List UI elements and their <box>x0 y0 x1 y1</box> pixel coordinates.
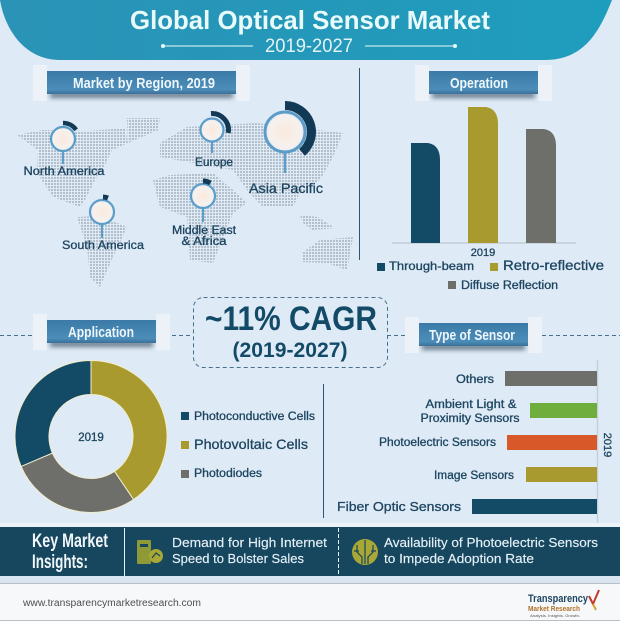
logo: Market Research <box>528 606 580 613</box>
legend: operation: Through-beam <box>389 259 474 273</box>
pin: middle east and africa <box>172 181 237 248</box>
logo: Analysis. Insights. Growth. <box>530 613 580 618</box>
bar chart: type of sensor: Proximity Sensors <box>420 413 520 425</box>
text: insight one: Demand for High Internet <box>172 535 327 550</box>
legend: application: Photovoltaic Cells <box>194 436 308 452</box>
logo <box>528 590 599 618</box>
icon: internet speed <box>137 540 163 564</box>
bar chart: type of sensor: Photoelectric Sensors <box>379 437 496 449</box>
heading: application <box>33 314 170 350</box>
panel: operation <box>377 65 604 292</box>
legend: application: Photodiodes <box>194 468 262 480</box>
footer <box>0 584 620 621</box>
heading: market by region <box>33 65 250 101</box>
pin: south america <box>62 197 144 252</box>
pin: middle east and africa: & Africa <box>182 236 227 248</box>
icon: circuit <box>352 539 378 565</box>
pin: europe: Europe <box>195 157 233 169</box>
pin: middle east and africa: Middle East <box>172 225 237 237</box>
heading: type of sensor: Type of Sensor <box>429 327 515 344</box>
text: insight two <box>384 535 599 566</box>
heading: market by region: Market by Region, 2019 <box>73 75 215 92</box>
pin: north america <box>24 123 105 178</box>
legend: operation <box>377 258 604 292</box>
bar chart: type of sensor: Image Sensors <box>434 470 514 482</box>
callout: CAGR: (2019-2027) <box>232 339 348 362</box>
legend: application: Photoconductive Cells <box>194 411 315 423</box>
panel: application <box>15 314 315 513</box>
pin: europe <box>195 113 233 169</box>
heading: type of sensor <box>405 317 542 353</box>
bar chart: operation: 2019 <box>471 247 495 259</box>
band: key market insights <box>0 523 620 583</box>
heading: key market insights: Insights: <box>32 552 88 573</box>
bar chart: type of sensor: 2019 <box>601 433 613 457</box>
legend: operation: Retro-reflective <box>503 258 604 273</box>
legend: application <box>181 411 315 480</box>
donut chart: 2019 <box>78 432 104 444</box>
logo: Transparency <box>528 593 589 605</box>
world dot map <box>17 118 353 287</box>
pin: asia pacific: Asia Pacific <box>249 181 323 196</box>
callout: CAGR <box>194 298 388 368</box>
text: insight one <box>172 535 327 566</box>
heading: operation <box>415 65 552 101</box>
header banner <box>0 0 612 60</box>
donut chart <box>15 360 167 513</box>
heading: application: Application <box>68 324 134 341</box>
text: insight two: to Impede Adoption Rate <box>384 551 534 566</box>
subtitle years: 2019-2027 <box>265 36 353 57</box>
text: insight two: Availability of Photoelectric Sensors <box>384 535 599 550</box>
heading: operation: Operation <box>450 75 508 92</box>
text: insight one: Speed to Bolster Sales <box>172 551 304 566</box>
bar chart: operation <box>392 107 576 259</box>
title: Global Optical Sensor Market <box>130 5 490 35</box>
legend: operation: Diffuse Reflection <box>461 280 558 292</box>
pin: south america: South America <box>62 238 144 252</box>
panel: type of sensor <box>337 317 613 523</box>
heading: key market insights: Key Market <box>32 531 108 552</box>
pin: asia pacific <box>249 106 323 196</box>
bar chart: type of sensor <box>337 360 613 523</box>
bar chart: type of sensor: Ambient Light & <box>426 399 517 411</box>
panel: market by region <box>17 65 353 287</box>
website url: www.transparencymarketresearch.com <box>22 598 201 609</box>
heading: key market insights <box>32 531 108 573</box>
pin: north america: North America <box>24 164 105 178</box>
bar chart: type of sensor: Others <box>456 374 494 386</box>
bar chart: type of sensor: Fiber Optic Sensors <box>337 499 462 514</box>
callout: CAGR: ~11% CAGR <box>205 300 377 338</box>
